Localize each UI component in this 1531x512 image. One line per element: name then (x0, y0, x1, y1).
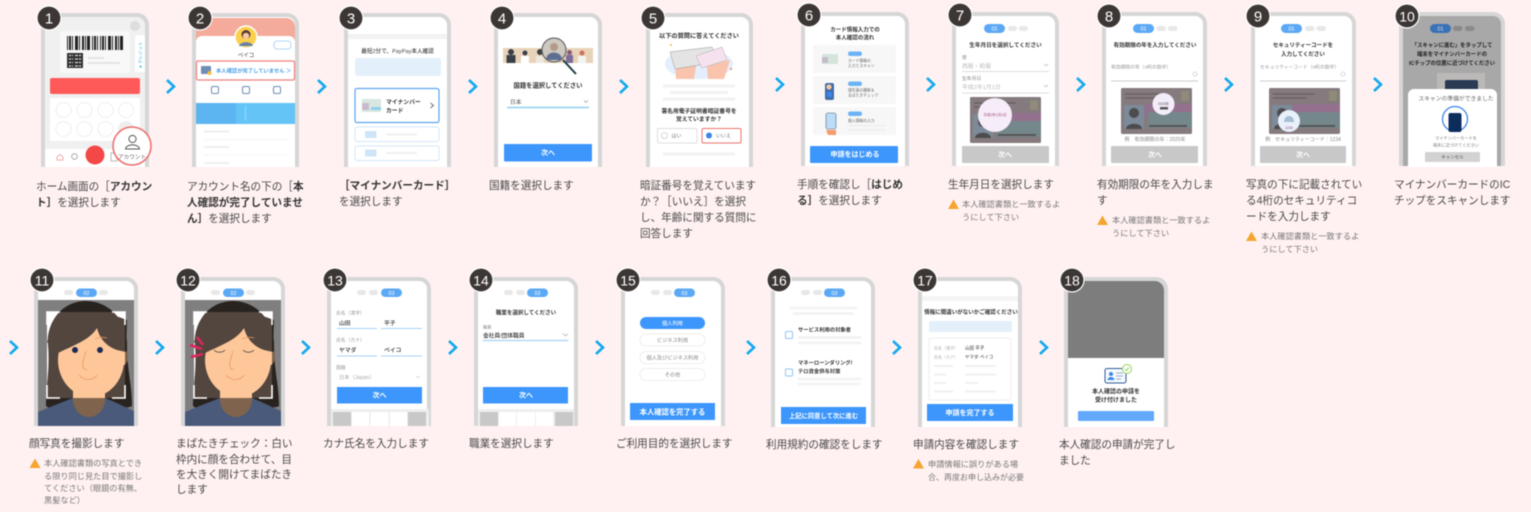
phone: date of birth: 平成2年1月1日 (962, 83, 1001, 91)
phone: expiry year: 例 有効期限の年：2025年 (1124, 136, 1186, 143)
instruction 5: 暗証番号を覚えています (640, 179, 756, 192)
step 3 (339, 6, 455, 208)
step number 11: 11 (35, 272, 49, 288)
warning note 7 (948, 199, 1060, 222)
step number 3 (339, 6, 363, 30)
phone: IC chip scan: ICチップの位置に近づけてください (1409, 59, 1496, 67)
instruction 12: します (176, 484, 208, 496)
phone: purpose: 個人利用 (662, 319, 683, 327)
warning note 17 (913, 459, 1024, 482)
phone: IC chip scan: キャンセル (1441, 155, 1464, 160)
phone: document choice: 最短2分で、PayPay本人確認 (361, 47, 434, 55)
step 2 (187, 6, 304, 225)
icon: ID card with check (1105, 364, 1132, 383)
step 12 (176, 268, 293, 496)
warning note 9: 本人確認書類と一致するよ (1261, 231, 1359, 241)
step number 18 (1060, 268, 1084, 292)
phone: date of birth: 平成2年1月1日 (983, 112, 1007, 117)
step 14 (469, 268, 576, 450)
phone: flow overview: カード情報の (848, 58, 871, 63)
instruction 8: 有効期限の年を入力しま (1097, 178, 1214, 191)
instruction 5: 回答します (640, 227, 693, 240)
step 5 (640, 6, 757, 240)
warning note 9 (1246, 231, 1359, 254)
instruction 13: カナ氏名を入力します (323, 437, 429, 450)
instruction 5: し、年齢に関する質問に (640, 211, 757, 224)
phone: occupation (476, 279, 576, 426)
instruction 9: ードを入力します (1246, 210, 1331, 223)
phone: IC chip scan: 01 (1437, 26, 1444, 32)
phone: nationality (496, 15, 600, 167)
instruction 18: 本人確認の申請が完了し (1059, 438, 1176, 451)
instruction 14: 職業を選択します (469, 437, 554, 450)
step number 14 (469, 268, 493, 292)
phone: complete: 受け付けました (1095, 396, 1137, 404)
phone: kana name: 平子 (384, 320, 396, 327)
instruction 12: まばたきチェック：白い (176, 437, 293, 450)
instruction 5: か？［いいえ］を選択 (640, 195, 746, 208)
icon: avatar (235, 26, 257, 48)
phone: account page (194, 15, 297, 167)
illustration: face with closed eyes (185, 300, 281, 426)
phone: occupation: 03 (535, 291, 540, 297)
phone: PIN question: 以下の質問に答えてください (659, 32, 739, 40)
step 17 (913, 268, 1024, 482)
phone: IC chip scan: 端末に近づけてください (1433, 142, 1479, 148)
phone: date of birth: 暦 (962, 55, 967, 61)
phone: date of birth: 生年月日を選択してください (969, 41, 1042, 49)
illustration: face with open eyes (38, 300, 134, 426)
step number 13: 13 (327, 272, 343, 288)
phone: flow overview: 入力とスキャン (848, 63, 875, 68)
phone: flow overview: まばたきチェック (848, 92, 879, 98)
phone: terms (773, 279, 873, 427)
phone: expiry year: 2025年 (1158, 101, 1170, 106)
instruction 2: 人確認が完了していませ (187, 196, 303, 209)
phone: review: 氏名（漢字） (934, 344, 958, 350)
warning note 17: 申請情報に誤りがある場 (928, 459, 1018, 469)
instruction 1: ト］を選択します (36, 196, 121, 209)
phone: review (920, 279, 1020, 427)
phone: kana name: ペイコ (384, 347, 401, 354)
phone: flow overview: 個人情報の入力 (848, 118, 875, 123)
phone: blink check (183, 279, 283, 426)
phone: purpose: 03 (682, 291, 687, 297)
phone: account page: 本人確認が完了していません ＞ (216, 66, 291, 74)
instruction 3: を選択します (339, 195, 403, 208)
step 10 (1394, 4, 1511, 207)
arrow 7 to 8 (1077, 78, 1084, 91)
phone: security code: 1234 (1285, 126, 1293, 130)
step number 10: 10 (1399, 8, 1415, 24)
step number 10 (1395, 4, 1419, 28)
warning note 8: うにして下さい (1112, 229, 1169, 238)
phone: kana name: 日本（Japan） (339, 373, 375, 381)
phone: review: ヤマダ ペイコ (965, 354, 993, 360)
icon: phone scan (1442, 106, 1468, 132)
phone: expiry year: 有効期限の年（4桁の数字） (1111, 64, 1171, 70)
phone: expiry year: 01 (1140, 26, 1147, 32)
instruction 12: を大きく開けてまばたき (176, 468, 292, 481)
arrow into 11 (10, 341, 17, 354)
instruction 18: ました (1059, 455, 1091, 467)
step number 8 (1097, 4, 1121, 28)
phone: purpose (623, 279, 723, 426)
instruction 15: ご利用目的を選択します (616, 437, 733, 450)
phone: terms: 03 (832, 291, 837, 297)
arrow 11 to 12 (156, 341, 163, 354)
icon: magnifier (542, 38, 576, 74)
phone: purpose: 本人確認を完了する (640, 408, 705, 416)
phone: terms: 上記に同意して次に進む (789, 411, 858, 420)
phone: document choice (346, 15, 449, 167)
phone: document choice: マイナンバー (386, 99, 421, 106)
phone: kana name: 03 (389, 291, 394, 297)
phone: PIN question (648, 15, 751, 167)
warning note 7: 本人確認書類と一致するよ (962, 199, 1060, 209)
arrow 1 to 2 (167, 80, 174, 93)
arrow 4 to 5 (620, 80, 627, 93)
warning note 11: 本人確認書類の写真とでき (44, 458, 142, 468)
icon: account callout: アカウント (118, 153, 146, 161)
phone: nationality: 国籍を選択してください (514, 80, 582, 90)
phone: home screen (43, 15, 151, 167)
instruction 17: 申請内容を確認します (913, 438, 1019, 451)
step 6 (797, 3, 907, 207)
phone: blink check: 02 (231, 291, 236, 297)
instruction 2: アカウント名の下の［本 (187, 180, 304, 193)
phone: date of birth: 生年月日 (962, 75, 981, 82)
step number 7: 7 (956, 8, 964, 24)
instruction 3: ［マイナンバーカード］ (339, 180, 455, 192)
instruction 2: ん］を選択します (187, 212, 272, 225)
phone: document choice: カード (386, 108, 404, 114)
instruction 3 (339, 180, 455, 208)
warning note 8 (1097, 215, 1210, 238)
phone: security code: セキュリティーコードを (1273, 41, 1333, 49)
phone: terms: マネーローンダリング/ (798, 358, 853, 366)
warning note 11 (30, 458, 142, 505)
instruction 2 (187, 180, 304, 225)
phone: security code: 入力してください (1281, 50, 1325, 58)
phone: kana name: ヤマダ (339, 346, 357, 354)
phone: security code (1253, 14, 1354, 166)
step 1 (36, 6, 152, 209)
arrow 15 to 16 (747, 341, 754, 354)
step 13 (323, 268, 429, 450)
phone: IC chip scan: スキャンの準備ができました (1418, 94, 1494, 102)
instruction 6: る］を選択します (797, 194, 882, 207)
phone: kana name: 国籍 (336, 364, 346, 371)
phone: expiry year: 有効期限の年を入力してください (1114, 41, 1197, 49)
phone: occupation: 職業を選択してください (496, 308, 557, 316)
phone: review: 山田 平子 (965, 344, 985, 352)
step number 5: 5 (649, 10, 657, 28)
step number 18: 18 (1064, 272, 1080, 288)
step 11 (29, 268, 142, 505)
phone: PIN question: 署名用電子証明書暗証番号を (661, 107, 737, 115)
step number 9 (1246, 4, 1270, 28)
phone: purpose: ビジネス利用 (657, 336, 688, 344)
phone: kana name: 氏名（漢字） (336, 310, 365, 316)
warning note 11: る限り同じ見た目で撮影し (44, 471, 142, 481)
phone: security code: 次へ (1296, 150, 1310, 159)
step number 11 (30, 268, 54, 292)
instruction 8 (1097, 178, 1214, 207)
step number 2 (188, 6, 212, 30)
arrow 13 to 14 (449, 341, 456, 354)
phone: kana name: 次へ (372, 390, 386, 400)
phone: security code: セキュリティーコード（4桁の数字） (1260, 64, 1339, 70)
phone: PIN question: はい (672, 134, 682, 140)
phone: nationality: 次へ (541, 148, 555, 157)
step number 6: 6 (805, 8, 813, 24)
step number 2: 2 (196, 10, 204, 28)
step 18 (1059, 268, 1176, 467)
arrow 8 to 9 (1225, 78, 1232, 91)
arrow 2 to 3 (318, 80, 325, 93)
phone: terms: テロ資金供与対策 (798, 367, 841, 375)
phone: date of birth (954, 14, 1057, 166)
step number 16 (767, 268, 791, 292)
instruction 1: ホーム画面の［アカウン (36, 181, 152, 193)
step number 13 (323, 268, 347, 292)
arrow 9 to 10 (1374, 78, 1381, 91)
instruction 7: 生年月日を選択します (948, 178, 1054, 191)
phone: IC chip scan: 「スキャンに進む」をタップして (1412, 41, 1492, 49)
arrow 16 to 17 (893, 341, 900, 354)
phone: date of birth: 01 (991, 26, 998, 32)
phone: expiry year: 次へ (1148, 150, 1162, 159)
instruction 6: 手順を確認し［はじめ (797, 178, 903, 191)
warning note 11: てください（眼鏡の有無、 (44, 483, 142, 493)
step 7 (948, 3, 1060, 222)
step 8 (1097, 4, 1214, 238)
phone: review: 氏名（カナ） (934, 354, 958, 360)
phone: occupation: 職業 (483, 324, 492, 330)
phone: review: 申請を完了する (946, 408, 994, 417)
step number 17: 17 (917, 272, 933, 288)
step number 6 (797, 3, 821, 27)
step number 1: 1 (45, 10, 53, 28)
step number 17 (913, 268, 937, 292)
phone: IC chip scan: マイナンバーカードを (1435, 134, 1477, 142)
instruction 11: 顔写真を撮影します (29, 437, 124, 450)
arrow 6 to 7 (927, 78, 934, 91)
phone: date of birth: 西暦・和暦 (962, 62, 991, 70)
phone: nationality: 日本 (510, 98, 522, 106)
instruction 6 (797, 178, 903, 207)
instruction 10 (1394, 179, 1511, 207)
phone: PIN question: いいえ (716, 134, 731, 140)
step number 3: 3 (347, 10, 355, 28)
step number 12: 12 (180, 272, 196, 288)
phone: review: 情報に間違いがないかご確認ください (924, 308, 1018, 316)
step number 12 (176, 268, 200, 292)
phone: flow overview: 申請をはじめる (830, 150, 880, 158)
warning note 7: うにして下さい (962, 213, 1019, 222)
phone: account page: ペイコ (238, 52, 254, 59)
icon: account callout (113, 127, 151, 165)
instruction 1 (36, 181, 152, 209)
instruction 16: 利用規約の確認をします (766, 438, 883, 451)
phone: complete (1066, 279, 1166, 427)
phone: kana name: 氏名（カナ） (336, 336, 365, 344)
phone: occupation: 次へ (519, 390, 533, 400)
step number 1 (37, 6, 61, 30)
step number 16: 16 (771, 272, 787, 288)
phone: flow overview: カード情報入力での (830, 26, 880, 34)
step number 14: 14 (473, 272, 489, 288)
arrow 3 to 4 (469, 80, 476, 93)
instruction 10: チップをスキャンします (1394, 195, 1511, 207)
arrow 5 to 6 (776, 78, 783, 91)
phone: flow overview (803, 14, 907, 166)
instruction 12: 枠内に顔を合わせて、目 (176, 453, 292, 466)
step number 8: 8 (1105, 8, 1113, 26)
arrow 17 to 18 (1040, 341, 1047, 354)
step number 7 (948, 3, 972, 27)
phone: expiry year (1104, 14, 1205, 166)
warning note 8: 本人確認書類と一致するよ (1112, 215, 1210, 225)
step 16 (766, 268, 883, 451)
step number 15: 15 (620, 272, 636, 288)
phone: IC chip scan: 端末をマイナンバーカードの (1417, 50, 1487, 58)
phone: purpose: その他 (665, 370, 680, 378)
phone: security code: 例 セキュリティーコード：1234 (1265, 136, 1341, 143)
instruction 5 (640, 179, 757, 240)
step number 15 (616, 268, 640, 292)
phone: flow overview: 顔写真の撮影＆ (848, 88, 875, 92)
step number 5 (641, 6, 665, 30)
phone: PIN question: 覚えていますか？ (676, 115, 722, 123)
arrow 12 to 13 (302, 341, 309, 354)
step number 9: 9 (1254, 8, 1262, 26)
phone: security code: 01 (1288, 26, 1295, 32)
illustration: hands holding card (665, 44, 733, 79)
phone: kana name (329, 279, 429, 426)
step number 4 (490, 6, 514, 30)
arrow 14 to 15 (596, 341, 603, 354)
phone: flow overview: 本人確認の流れ (836, 34, 875, 42)
phone: kana name: 山田 (339, 319, 351, 327)
instruction 4: 国籍を選択します (489, 179, 574, 192)
phone: IC chip scan (1401, 14, 1503, 167)
instruction 9: る4桁のセキュリティコ (1246, 194, 1357, 207)
step 4 (489, 6, 600, 192)
warning note 17: 合、再度お申し込みが必要 (928, 472, 1024, 482)
instruction 9 (1246, 178, 1362, 223)
phone: complete: 本人確認の申請を (1092, 388, 1140, 396)
warning note 11: 黒髪など） (44, 495, 85, 505)
instruction 9: 写真の下に記載されてい (1246, 178, 1362, 191)
step 15 (616, 268, 733, 450)
phone: purpose: 個人及びビジネス利用 (647, 354, 698, 362)
phone: face photo: 02 (84, 291, 89, 297)
step number 4: 4 (498, 10, 506, 28)
phone: terms: サービス利用の対象者 (798, 326, 852, 334)
warning note 9: うにして下さい (1261, 245, 1318, 254)
phone: home screen: ● クレジット (138, 42, 144, 68)
phone: face photo (36, 279, 136, 426)
phone: occupation: 会社員/団体職員 (483, 332, 525, 340)
instruction 18 (1059, 438, 1176, 467)
phone: date of birth: 次へ (998, 150, 1012, 159)
instruction 12 (176, 437, 293, 496)
step 9 (1246, 4, 1362, 254)
instruction 10: マイナンバーカードのIC (1394, 179, 1511, 191)
instruction 8: す (1097, 195, 1108, 207)
